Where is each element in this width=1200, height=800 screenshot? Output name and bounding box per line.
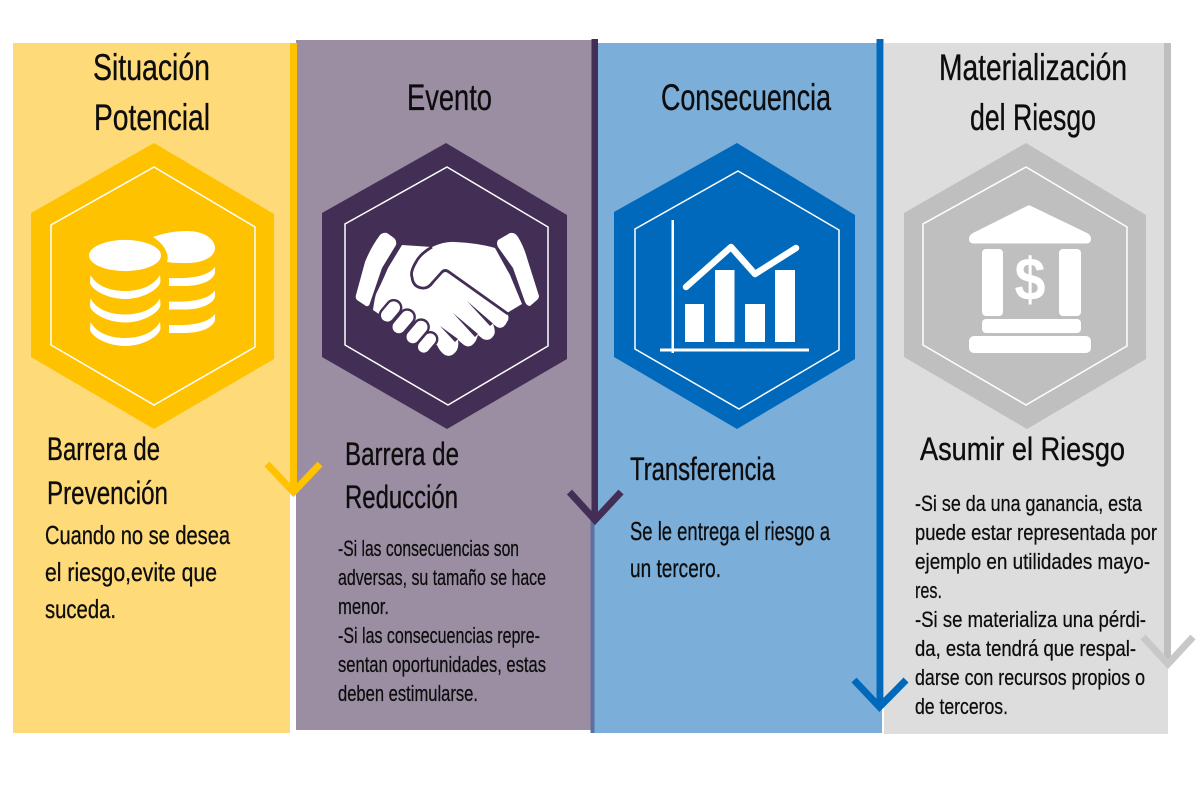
panel: Evento — [296, 40, 594, 730]
heading: Materialización del Riesgo — [939, 47, 1127, 138]
text block: transferencia — [630, 516, 830, 583]
arrow: blue — [854, 39, 906, 707]
text block: prevención: Cuando no se desea — [45, 520, 230, 550]
hexagon badge: handshake — [322, 143, 567, 429]
text block: asumir: da, esta tendrá que respal- — [915, 636, 1136, 661]
text block: asumir: darse con recursos propios o — [915, 665, 1145, 690]
panel: Situación Potencial — [13, 43, 290, 733]
text block: prevención: el riesgo,evite que — [45, 557, 217, 587]
subheading: Barrera de Prevención — [47, 431, 168, 511]
arrow: grey — [1143, 43, 1193, 665]
hexagon badge: chart — [614, 143, 855, 429]
icon: handshake — [356, 233, 539, 357]
text block: asumir: puede estar representada por — [915, 520, 1157, 545]
text block: reducción: menor. — [338, 594, 389, 619]
hexagon badge: bank — [904, 143, 1146, 429]
heading: Situación Potencial — [93, 47, 210, 138]
heading: Materialización del Riesgo: Materialización — [939, 47, 1127, 88]
icon: bank: $ — [1014, 246, 1046, 313]
text block: asumir: de terceros. — [915, 694, 1008, 719]
text block: prevención — [45, 520, 230, 624]
arrow: purple — [570, 39, 621, 521]
text block: reducción: sentan oportunidades, estas — [338, 652, 546, 677]
heading: Consecuencia: Consecuencia — [661, 77, 831, 118]
icon: bank — [969, 205, 1091, 353]
heading: Evento: Evento — [407, 77, 492, 118]
text block: asumir: -Si se da una ganancia, esta — [915, 491, 1143, 516]
heading: Materialización del Riesgo: del Riesgo — [970, 97, 1096, 138]
text block: asumir: -Si se materializa una pérdi- — [915, 607, 1146, 632]
subheading: Barrera de Reducción: Reducción — [345, 479, 458, 515]
subheading: Asumir el Riesgo: Asumir el Riesgo — [920, 431, 1125, 467]
text block: reducción: -Si las consecuencias repre- — [338, 623, 540, 648]
subheading: Transferencia: Transferencia — [630, 451, 775, 487]
icon: bar chart with trend line — [660, 220, 809, 353]
hexagon badge: coins — [31, 143, 274, 429]
subheading: Barrera de Reducción: Barrera de — [345, 436, 459, 472]
panel: Consecuencia — [590, 43, 882, 733]
text block: asumir: res. — [915, 578, 942, 603]
heading: Situación Potencial: Situación — [93, 47, 210, 88]
text block: reducción: deben estimularse. — [338, 681, 478, 706]
text block: transferencia: Se le entrega el riesgo a — [630, 516, 830, 546]
text block: transferencia: un tercero. — [630, 553, 721, 583]
icon: coins — [89, 231, 215, 346]
heading: Situación Potencial: Potencial — [94, 97, 210, 138]
panel: Materialización del Riesgo — [884, 43, 1168, 734]
text block: asumir: ejemplo en utilidades mayo- — [915, 549, 1150, 574]
text block: asumir — [915, 491, 1157, 719]
text block: reducción: -Si las consecuencias son — [338, 536, 519, 561]
text block: reducción: adversas, su tamaño se hace — [338, 565, 546, 590]
text block: reducción — [338, 536, 546, 706]
subheading: Barrera de Prevención: Prevención — [47, 475, 168, 511]
text block: prevención: suceda. — [45, 594, 116, 624]
arrow: gold — [267, 43, 320, 492]
subheading: Barrera de Prevención: Barrera de — [47, 431, 160, 467]
subheading: Barrera de Reducción — [345, 436, 459, 515]
